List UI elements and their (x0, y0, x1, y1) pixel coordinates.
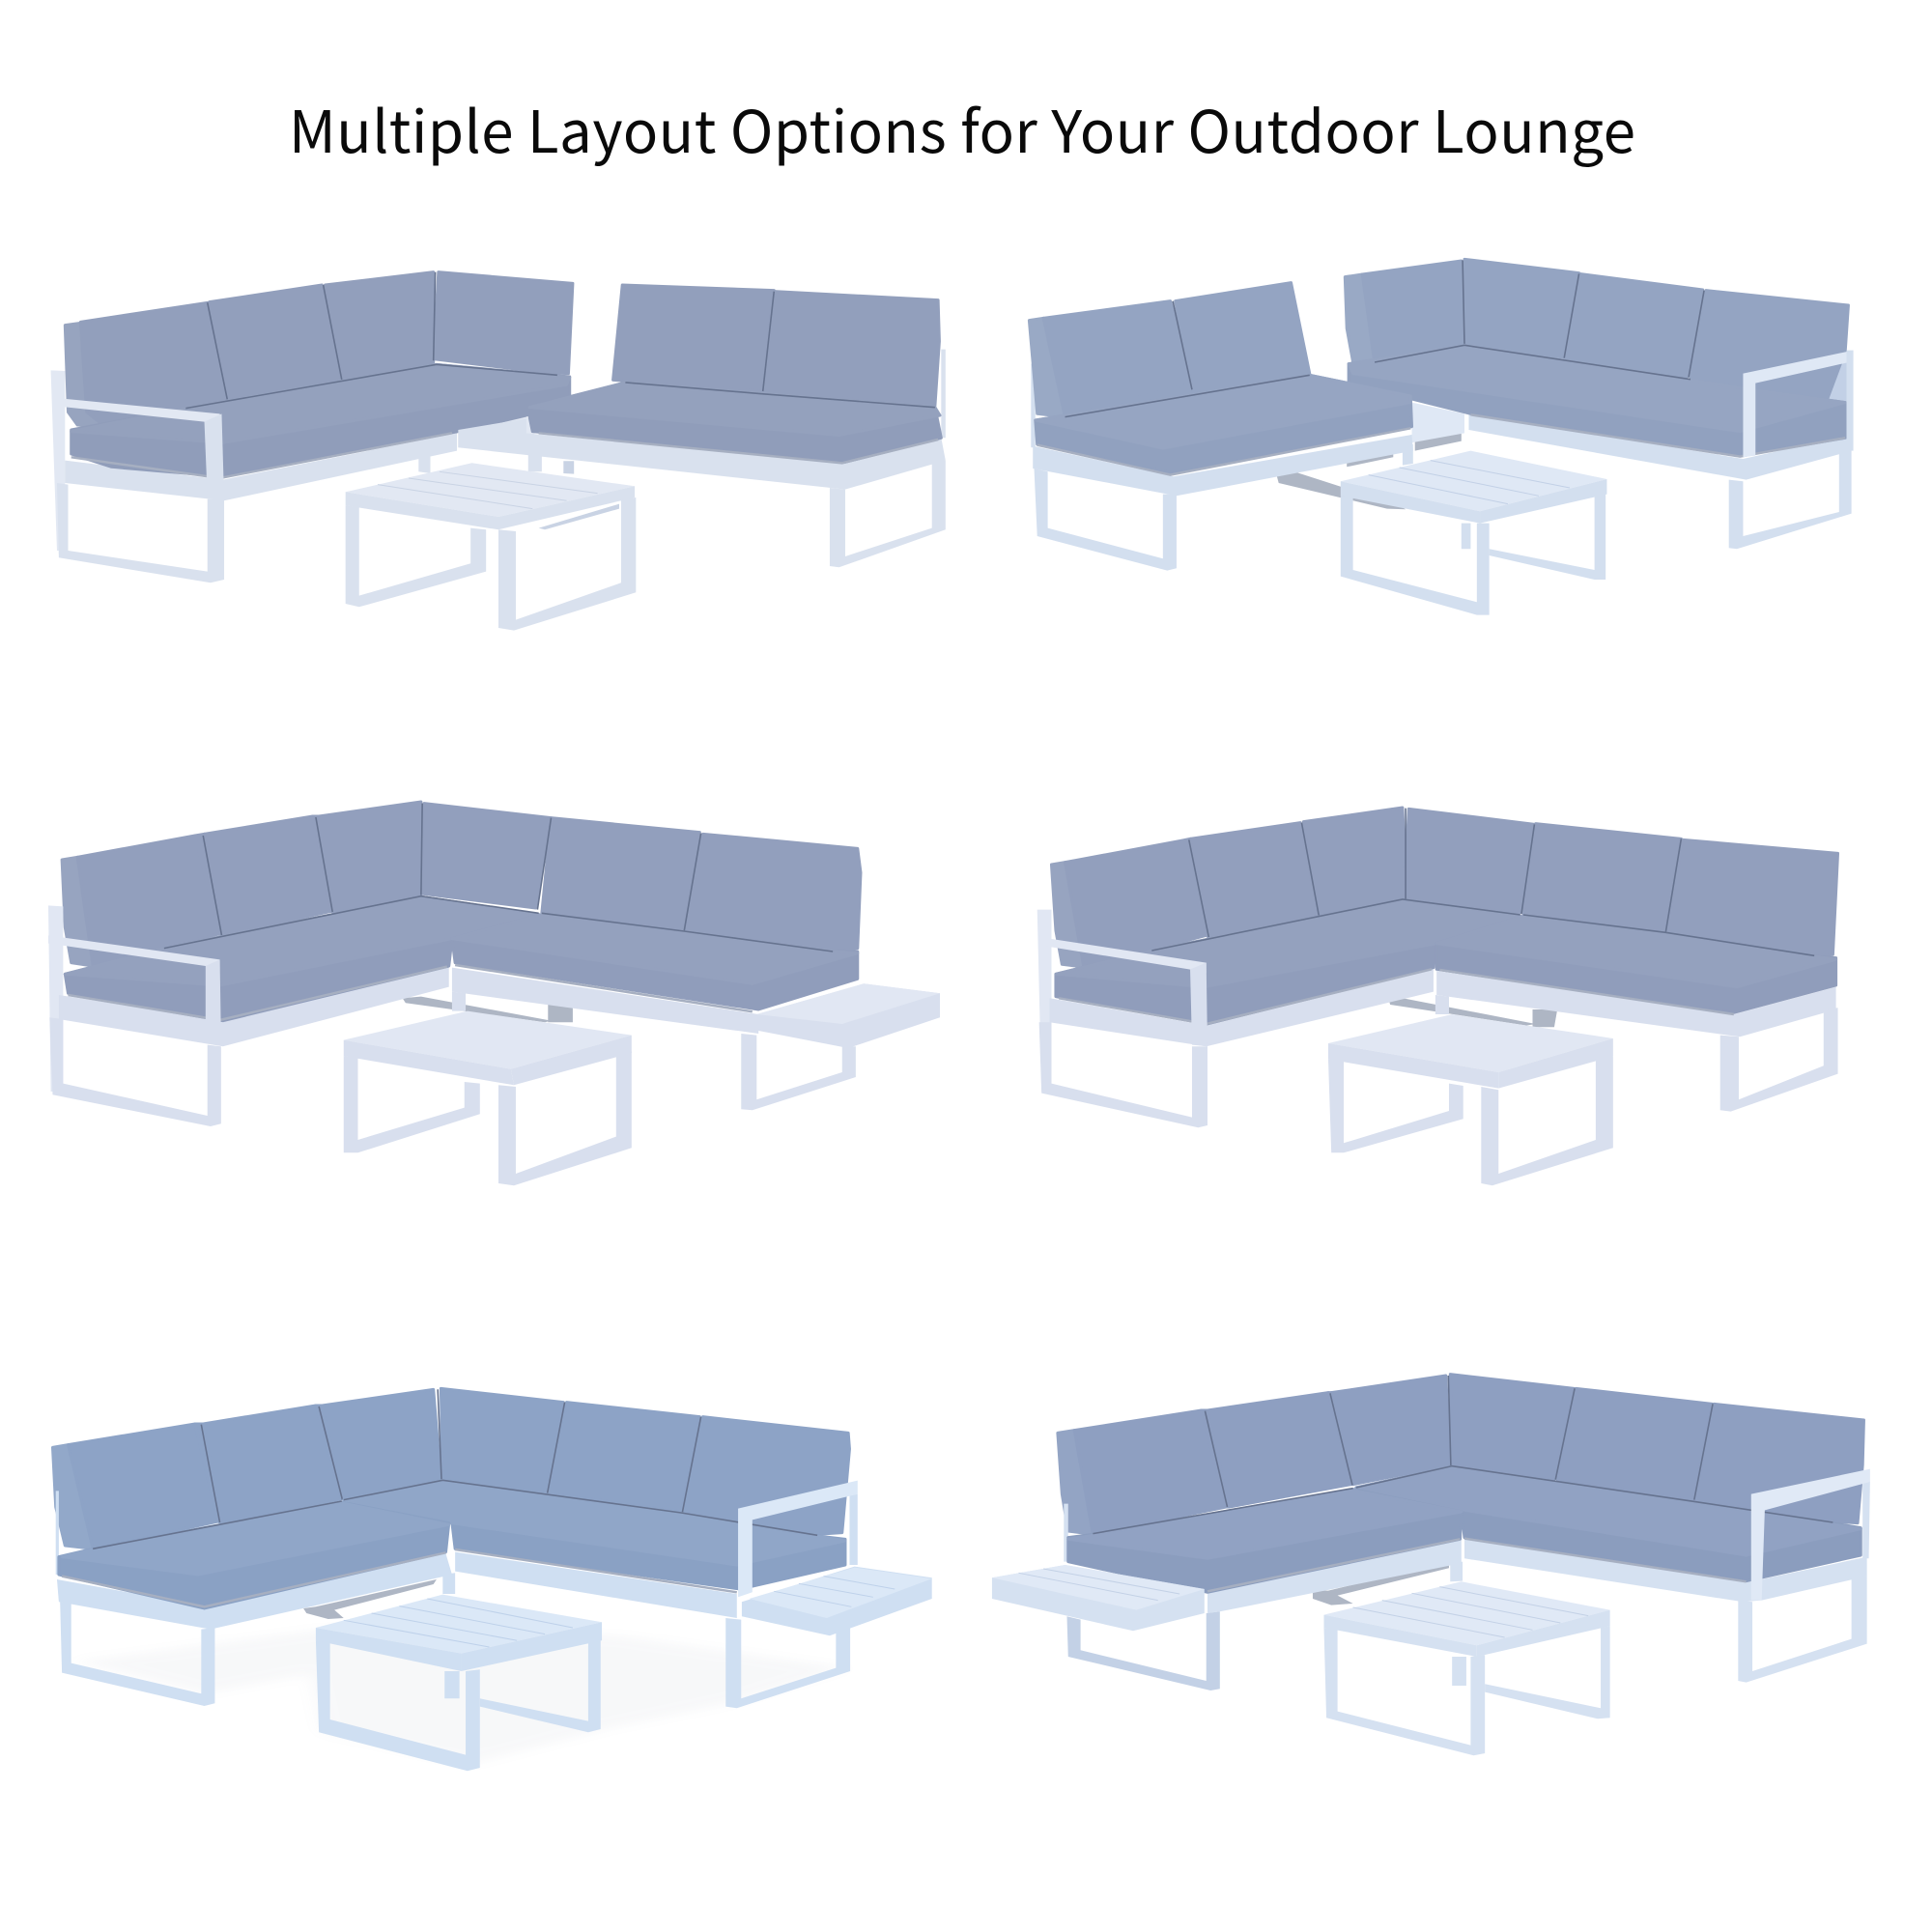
seat cushions (65, 896, 858, 1021)
right sofa seat cushion (1349, 345, 1845, 457)
panel: layout 6, L-shape with left side table (992, 1375, 1870, 1755)
left sofa back cushions (1029, 283, 1310, 447)
right sofa back cushions (1345, 259, 1848, 408)
left sofa frame (51, 370, 457, 582)
right sofa back cushions (613, 285, 946, 438)
pull-out side table (992, 1565, 1205, 1631)
grey swivel mechanism (1313, 1562, 1449, 1605)
panel: layout 2, separated sofas mirrored (1029, 259, 1854, 615)
panel: layout 3, L-shape with side table right (48, 802, 940, 1185)
left seat cushion (1068, 1489, 1462, 1592)
left sofa seat cushion (1036, 375, 1412, 475)
armrest (1039, 937, 1208, 1046)
frame rails and legs (48, 905, 856, 1126)
coffee table (346, 463, 636, 631)
coffee table (316, 1595, 602, 1771)
left sofa back cushions (65, 272, 573, 427)
pull-out side table (742, 1567, 932, 1635)
armrest (48, 935, 221, 1040)
frame rails and legs (1064, 1504, 1867, 1690)
coffee table (344, 1011, 632, 1185)
grey swivel mechanism (1275, 433, 1462, 509)
soft floor shadows (74, 1630, 848, 1765)
grey swivel mechanism (403, 997, 573, 1022)
left sofa seat cushion (71, 364, 570, 478)
right seat cushion (344, 1480, 845, 1592)
left sofa frame (1033, 435, 1413, 571)
grey swivel mechanism (1389, 998, 1557, 1027)
right seat cushion (1356, 1466, 1861, 1581)
frame rails and legs (1037, 910, 1838, 1127)
right sofa armrest (1743, 351, 1854, 457)
back legs and center corner table (418, 417, 574, 474)
panel: layout 4, L-shape (1037, 808, 1838, 1185)
panel: layout 1, separated sofas (51, 272, 946, 631)
coffee table (1328, 1014, 1613, 1185)
coffee table (1341, 451, 1606, 615)
left seat cushion (59, 1501, 449, 1608)
back cushions (1058, 1375, 1863, 1534)
armrest (1751, 1469, 1870, 1601)
back cushions (52, 1388, 849, 1548)
frame rails and legs (56, 1491, 850, 1708)
title: Multiple Layout Options for Your Outdoor Lounge (289, 86, 1635, 170)
coffee table (1323, 1581, 1610, 1755)
pull-out side table (756, 983, 940, 1048)
grey swivel mechanism (303, 1579, 437, 1619)
panel: layout 5, L-shape with right armrest and side table (52, 1388, 932, 1771)
right sofa frame (1468, 413, 1852, 549)
armrest (738, 1481, 858, 1597)
back cushions (1051, 808, 1838, 967)
right sofa frame (458, 418, 946, 567)
center corner table (1412, 403, 1464, 442)
seat cushions (1056, 899, 1836, 1024)
back cushions (62, 802, 861, 966)
right sofa seat cushion (527, 383, 941, 463)
left sofa armrest (52, 398, 224, 499)
